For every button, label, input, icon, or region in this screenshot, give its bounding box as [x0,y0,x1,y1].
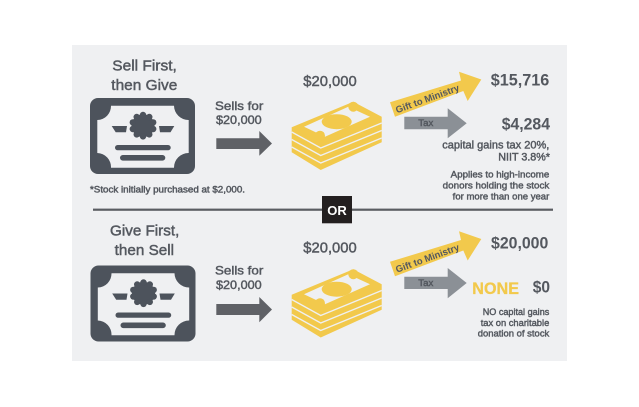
badge: or: OR [327,203,347,218]
arrow: gift to ministry top [390,72,481,117]
arrow: sells bottom [216,297,272,322]
heading: give first, then sell: Give First, [110,224,179,240]
arrow: sells top [216,131,272,156]
text: applies to note: Applies to high-income [451,170,549,181]
value: 15,716: $15,716 [491,70,549,89]
label: sells for bottom: Sells for [215,263,263,277]
heading: give first, then sell [110,224,179,259]
text: applies to note [443,170,550,202]
value: 20,000: $20,000 [491,233,548,252]
text: no capital gains note: tax on charitable [481,318,549,329]
label: none: NONE [472,280,519,298]
amount top: $20,000 [303,74,357,90]
arrow: tax bottom: Tax [418,278,434,289]
heading: sell first, then give: Sell First, [112,58,177,74]
label: sells for top [215,99,263,127]
text: applies to note: for more than one year [453,191,549,202]
icon: money stack bottom [292,269,382,338]
icon: stock certificate bottom [90,266,196,342]
arrow: gift to ministry top: Gift to Ministry [394,83,462,116]
amount bottom: $20,000 [303,241,357,257]
badge: or [322,196,352,223]
arrow: gift to ministry bottom: Gift to Ministry [394,242,462,276]
label: sells for top: $20,000 [216,113,262,127]
arrow: tax top [404,108,467,138]
label: sells for bottom: $20,000 [216,278,262,292]
text: no capital gains note: donation of stock [478,329,550,340]
label: sells for top: Sells for [215,99,263,113]
value: 0: $0 [533,278,550,297]
label: sells for bottom [215,263,263,292]
arrow: gift to ministry bottom [390,231,481,276]
footnote: *Stock initially purchased at $2,000. [90,184,245,194]
text: applies to note: donors holding the stock [443,181,550,192]
heading: sell first, then give [111,58,177,94]
text: no capital gains note: NO capital gains [483,307,550,318]
heading: give first, then sell: then Sell [115,243,174,259]
text: no capital gains note [478,307,550,340]
arrow: tax bottom [404,268,467,298]
icon: stock certificate top [90,98,195,174]
text: tax breakdown [442,139,551,164]
background panel [72,45,567,361]
arrow: tax top: Tax [418,118,434,129]
text: tax breakdown: NIIT 3.8%* [498,152,551,164]
text: tax breakdown: capital gains tax 20%, [442,139,549,151]
heading: sell first, then give: then Give [111,78,177,94]
value: 4,284: $4,284 [502,114,551,133]
icon: money stack top [292,102,382,170]
